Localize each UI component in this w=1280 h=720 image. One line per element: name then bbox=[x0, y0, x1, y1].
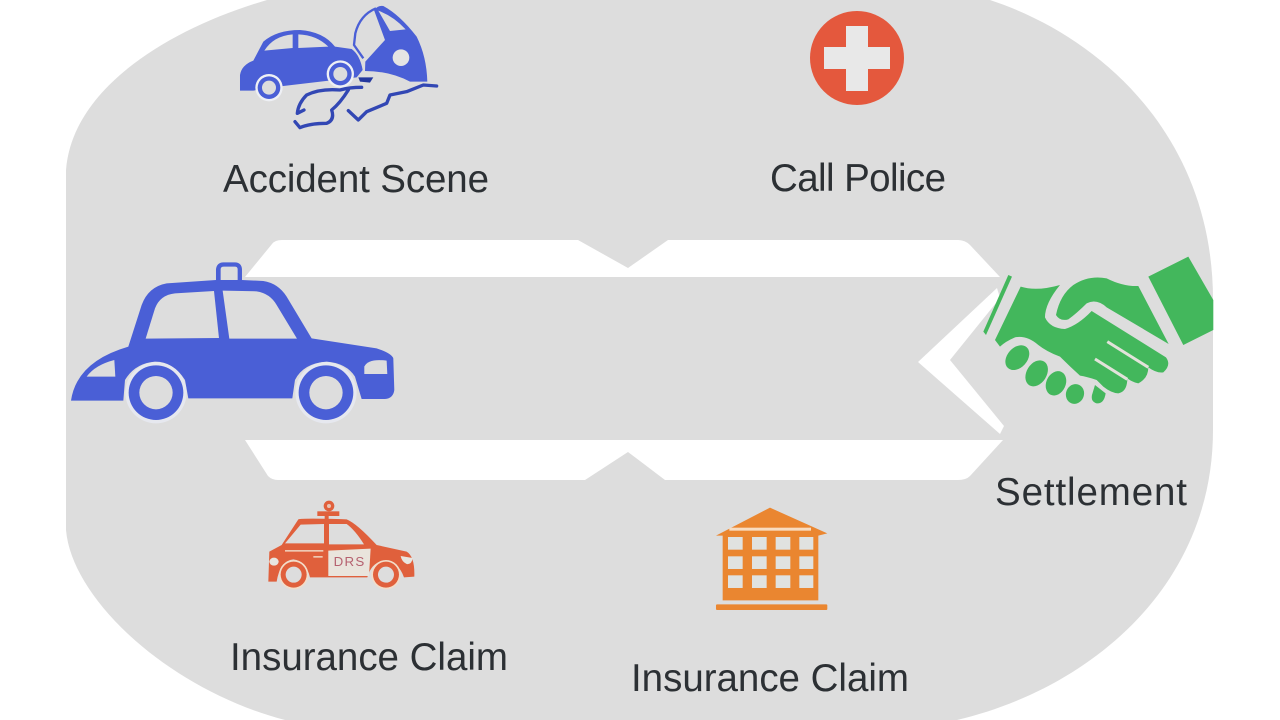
panel: lower white track bbox=[245, 440, 1003, 480]
label: call police: Call Police bbox=[770, 157, 946, 200]
icon: green handshake bbox=[983, 257, 1213, 406]
icon: medical cross bbox=[810, 11, 904, 105]
label: accident scene: Accident Scene bbox=[223, 158, 489, 201]
label: insurance claim left: Insurance Claim bbox=[230, 636, 508, 679]
icon: orange-red car bbox=[268, 501, 414, 589]
label: settlement: Settlement bbox=[995, 471, 1187, 514]
panel: upper white track bbox=[245, 240, 1000, 277]
icon: blue police car bbox=[71, 262, 394, 423]
icon: orange building bbox=[716, 508, 827, 610]
panel: white chevron notch bbox=[918, 288, 1004, 434]
label: insurance claim right: Insurance Claim bbox=[631, 657, 909, 700]
icon: orange-red car: DRS bbox=[334, 554, 364, 569]
icon: accident scene cars bbox=[240, 6, 437, 128]
